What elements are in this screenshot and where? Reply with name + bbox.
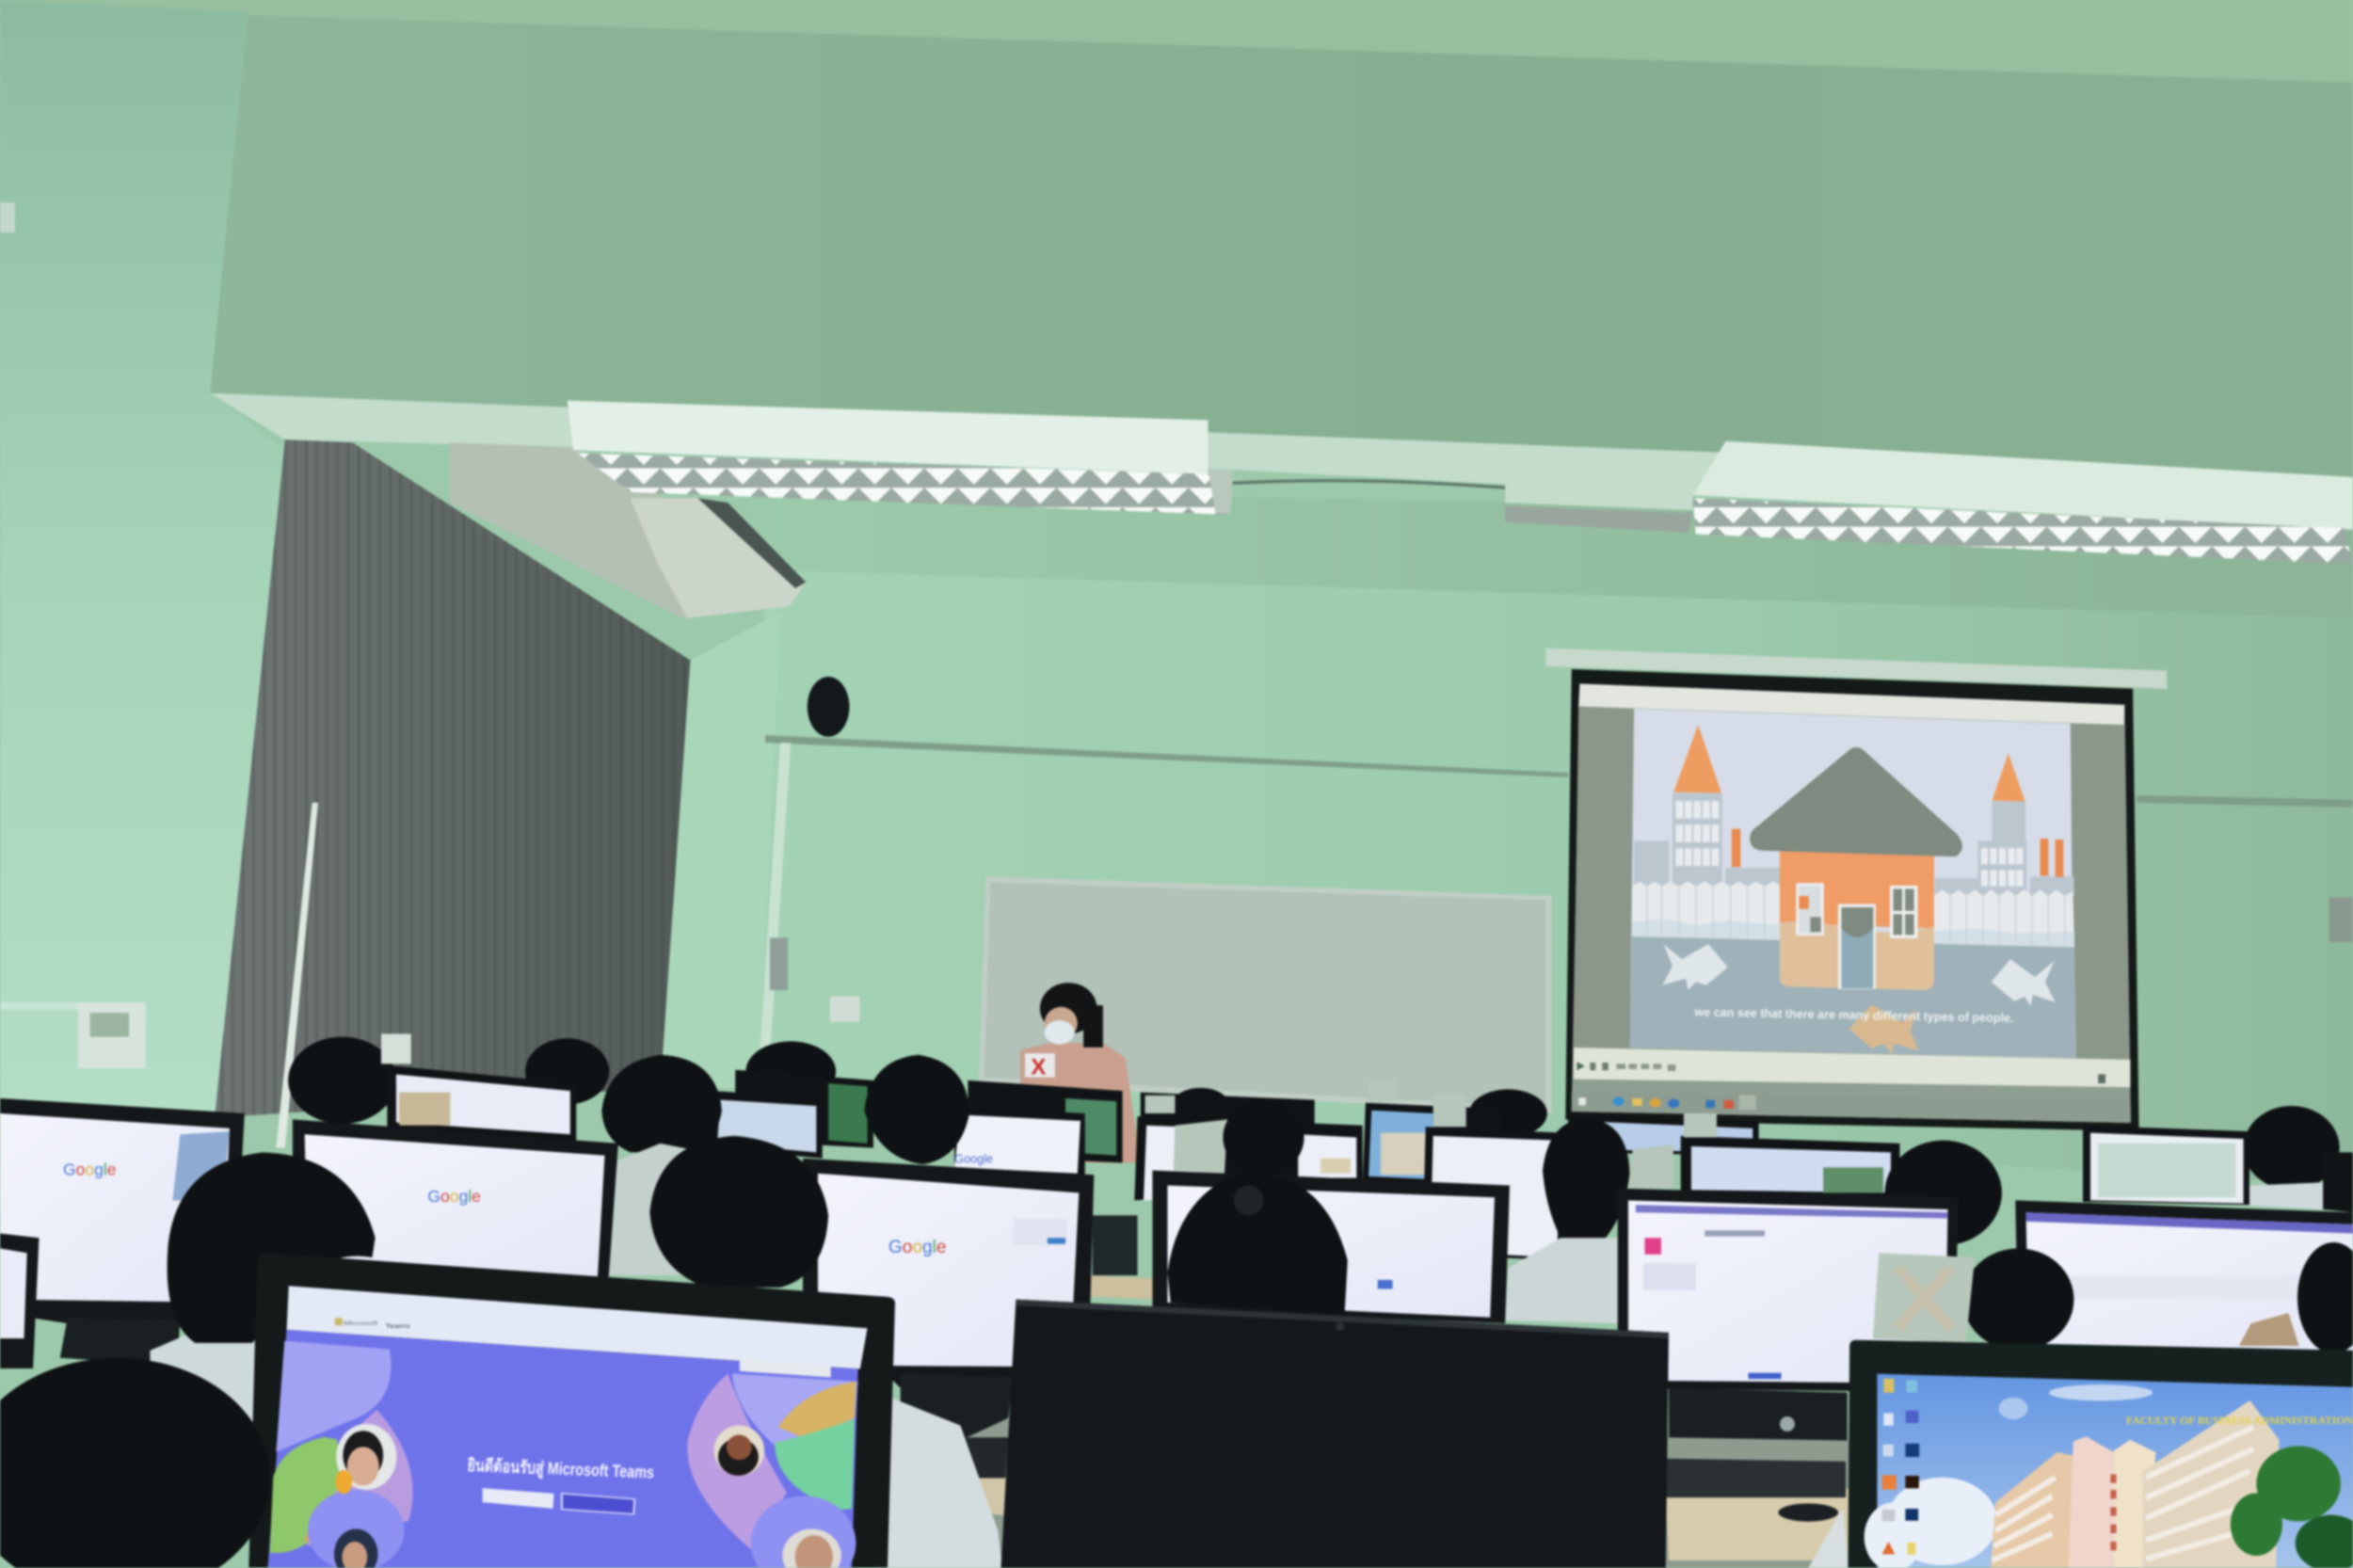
- stand centre: [901, 1373, 1013, 1440]
- portrait man right: [782, 1528, 841, 1568]
- red x sign: X: [1031, 1054, 1046, 1080]
- window title bar: [1578, 683, 2124, 725]
- teams monitor: [248, 1253, 895, 1568]
- fish orange: [1849, 1004, 1918, 1054]
- divider card with x: [1873, 1253, 1975, 1343]
- student white shirt front centre: [878, 1396, 1002, 1568]
- speaker: [808, 677, 849, 737]
- monitor chin: [1669, 1388, 1848, 1440]
- middle row students behind monitors: [601, 1055, 2002, 1323]
- portrait woman: [335, 1424, 396, 1494]
- projector screen: [1565, 669, 2139, 1131]
- outline button: [562, 1494, 634, 1514]
- left skyline: [1634, 840, 2074, 896]
- teams heading: ยินดีต้อนรับสู่ Microsoft Teams: [467, 1455, 655, 1483]
- white fence: [1632, 881, 2074, 947]
- monitor far left: [0, 1098, 245, 1323]
- student with bun: [1167, 1173, 1348, 1315]
- bottom left student head: [0, 1358, 270, 1568]
- right blob pink: [687, 1374, 787, 1549]
- fish right: [1992, 959, 2056, 1006]
- presenter: [1020, 983, 1141, 1163]
- left blob green: [270, 1437, 339, 1553]
- house: [1750, 747, 1962, 990]
- desktop icons: [1882, 1379, 1919, 1555]
- student centre: [649, 1136, 828, 1288]
- tree: [2231, 1446, 2353, 1568]
- screen frame: [1565, 669, 2139, 1131]
- windows taskbar: [1572, 1092, 2131, 1123]
- building: [1991, 1400, 2279, 1568]
- projector screen casing: [1545, 648, 2167, 689]
- back row monitors: [387, 1065, 2353, 1260]
- monitor centre right: [1152, 1171, 1510, 1323]
- monitor far right: [2015, 1200, 2353, 1358]
- wallpaper title: FACULTY OF BUSINESS ADMINISTRATION: [2126, 1416, 2353, 1427]
- desktop background: [1572, 683, 2131, 1123]
- microsoft logo: [335, 1318, 343, 1325]
- left blob lilac: [276, 1341, 391, 1452]
- keyboard centre: [952, 1437, 1008, 1478]
- google logo centre: Google: [888, 1238, 947, 1257]
- video side bars: [1574, 707, 2130, 1060]
- hp logo: [1780, 1416, 1795, 1432]
- portrait bottom left: [334, 1528, 377, 1568]
- centre black monitor: [1000, 1300, 1669, 1568]
- dropdown: [740, 1360, 831, 1378]
- stand far left: [60, 1318, 180, 1366]
- video sky: [1630, 709, 2073, 1058]
- back row people: [288, 1037, 2340, 1190]
- monitor centre: [803, 1159, 1094, 1388]
- google logo far left: Google: [63, 1160, 116, 1178]
- ceiling light right: [1505, 441, 2353, 564]
- desktop wallpaper monitor: [1848, 1340, 2353, 1568]
- hand: [2239, 1313, 2299, 1346]
- media player controls: [1574, 1048, 2130, 1087]
- desks: [960, 1275, 1849, 1568]
- middle row heads in front of monitors: [150, 1136, 2353, 1433]
- whiteboard: [979, 876, 1552, 1113]
- page background: [267, 1330, 858, 1567]
- google logo left centre: Google: [427, 1187, 481, 1206]
- student far right: [2297, 1242, 2353, 1353]
- right blob yellow: [778, 1382, 856, 1440]
- left blob pink: [308, 1410, 413, 1546]
- left tower: [1673, 725, 1740, 888]
- right tower: [1977, 753, 2063, 896]
- left blob blue: [308, 1490, 405, 1568]
- student right of front monitor: [1808, 1508, 1849, 1568]
- curtain: [215, 440, 690, 1148]
- ceiling light left: [568, 401, 1234, 515]
- keyboard right: [1666, 1459, 1846, 1497]
- student left: [150, 1328, 255, 1433]
- shirt of back right student: [2209, 1182, 2326, 1209]
- google text on small monitor: Google: [954, 1152, 993, 1166]
- teams monitor: Teams: [385, 1322, 410, 1330]
- right blob lilac: [732, 1374, 858, 1452]
- wall edge fixture: [0, 202, 15, 232]
- subtitle: we can see that there are many different types of people.: [1693, 1006, 2014, 1026]
- bezel: [1848, 1340, 2353, 1568]
- portrait woman right: [714, 1426, 764, 1476]
- small paper cards: [381, 1033, 1717, 1189]
- left blob orange: [303, 1490, 360, 1543]
- mouse right: [1778, 1503, 1838, 1522]
- right blob green: [775, 1419, 855, 1511]
- bezel: [248, 1253, 895, 1567]
- clouds: [1865, 1384, 2153, 1568]
- monitor right centre: [1618, 1189, 1959, 1440]
- right blob blue: [751, 1496, 856, 1568]
- wall controls: [78, 897, 2353, 1068]
- browser chrome: [287, 1286, 867, 1369]
- primary button: [483, 1488, 553, 1509]
- small left edge monitor: [0, 1233, 39, 1368]
- air conditioner: [450, 442, 806, 618]
- nav text: Microsoft: [344, 1320, 378, 1327]
- water: [1630, 936, 2076, 1058]
- monitor left centre: [293, 1119, 618, 1290]
- fish left: [1662, 944, 1728, 990]
- wallpaper sky: [1877, 1374, 2353, 1568]
- student right: [1962, 1248, 2073, 1351]
